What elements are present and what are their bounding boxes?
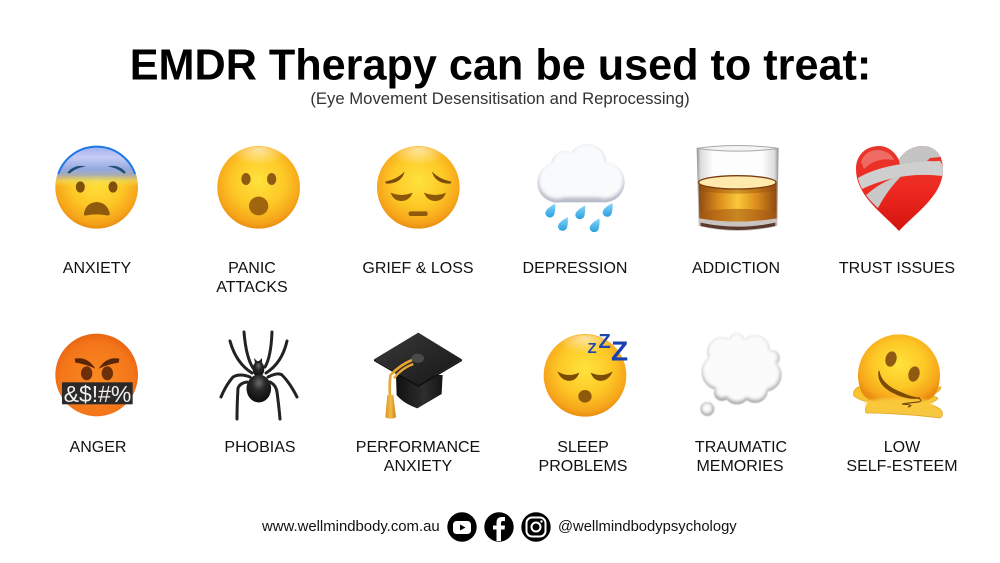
label: performance anxiety: ANXIETY xyxy=(384,458,453,475)
panel: addiction xyxy=(692,145,780,277)
label: phobias: PHOBIAS xyxy=(224,439,296,456)
icon: sleep z letters: Z xyxy=(611,336,628,366)
label: depression: DEPRESSION xyxy=(523,260,627,277)
icon: fearful face xyxy=(55,146,138,229)
icon: whisky glass xyxy=(697,145,779,231)
label: low self-esteem: LOW xyxy=(884,439,921,456)
panel: panic attacks xyxy=(216,146,300,296)
label: sleep problems: PROBLEMS xyxy=(539,458,627,475)
icon: spider xyxy=(221,332,297,419)
icon: melting face xyxy=(854,334,942,418)
icon: swearing face xyxy=(55,334,138,416)
icon: rain cloud xyxy=(537,144,625,232)
footer: website: www.wellmindbody.com.au xyxy=(261,519,440,535)
panel: low self-esteem xyxy=(846,334,958,475)
icon: facebook xyxy=(484,512,514,542)
panel: depression xyxy=(523,144,627,277)
panel: trust issues xyxy=(839,146,955,277)
panel: performance anxiety xyxy=(356,333,480,475)
icon: surprised face xyxy=(217,146,300,229)
text: censored symbols: &$!#% xyxy=(64,381,131,407)
label: trust issues: TRUST ISSUES xyxy=(839,260,955,277)
label: sleep problems: SLEEP xyxy=(557,439,609,456)
icon: sleep z letters: Z xyxy=(588,340,597,357)
label: traumatic memories: TRAUMATIC xyxy=(695,439,787,456)
icon: sleeping face xyxy=(544,334,626,417)
label: traumatic memories second line: MEMORIES xyxy=(696,458,784,475)
label: panic attacks: ATTACKS xyxy=(216,279,288,296)
label: anger: ANGER xyxy=(70,439,126,456)
icon: pensive face xyxy=(377,146,460,229)
icon: sleep z letters: Z xyxy=(598,331,611,353)
label: low self-esteem: SELF-ESTEEM xyxy=(846,458,958,475)
icon: graduation cap xyxy=(374,333,462,419)
label: performance anxiety: PERFORMANCE xyxy=(356,439,480,456)
subtitle: (Eye Movement Desensitisation and Reprocessing) xyxy=(310,89,690,108)
label: panic attacks: PANIC xyxy=(228,260,276,277)
panel: grief and loss xyxy=(362,146,474,277)
panel: anger xyxy=(55,334,138,456)
icon: mending heart xyxy=(856,146,943,231)
label: grief and loss: GRIEF & LOSS xyxy=(362,260,474,277)
label: anxiety: ANXIETY xyxy=(63,260,132,277)
footer: social handle: @wellmindbodypsychology xyxy=(558,519,737,535)
panel: traumatic memories xyxy=(695,333,787,475)
icon: youtube xyxy=(447,512,477,542)
icon: instagram xyxy=(521,512,551,542)
panel: sleep problems xyxy=(539,331,628,475)
title: EMDR Therapy can be used to treat: xyxy=(130,42,871,90)
panel: anxiety xyxy=(55,146,138,277)
panel: phobias xyxy=(221,332,297,456)
icon: sleep z letters xyxy=(588,331,628,366)
icon: thought bubble xyxy=(700,333,782,416)
label: addiction: ADDICTION xyxy=(692,260,780,277)
